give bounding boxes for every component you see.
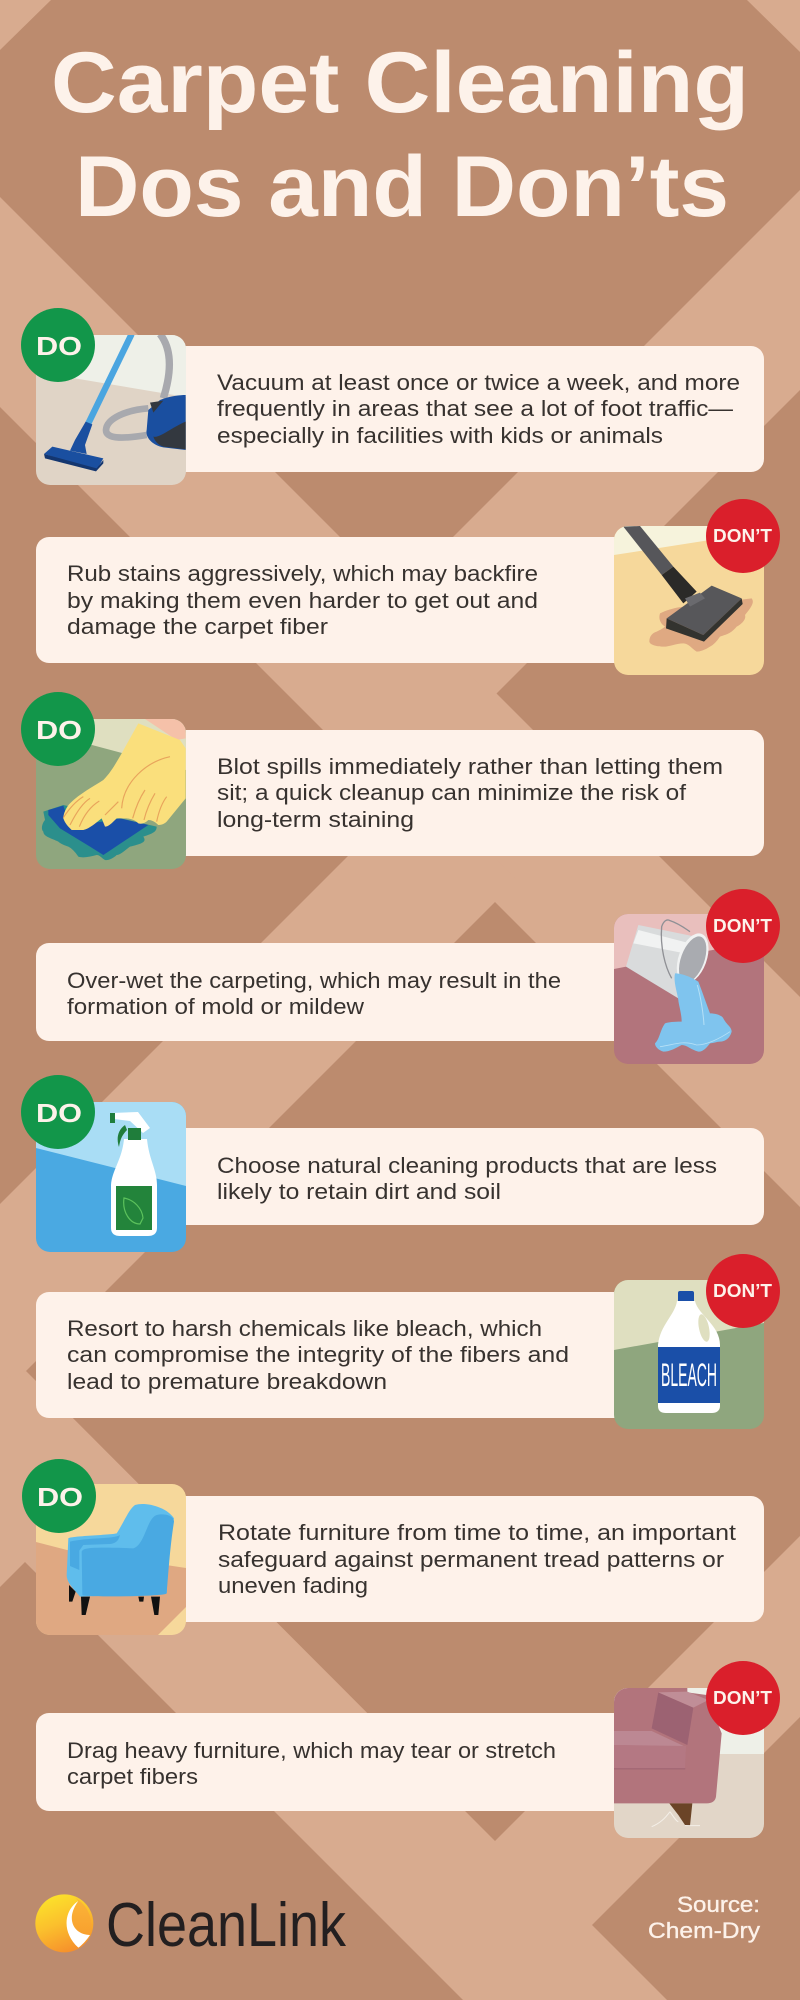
badge: dont: [706, 499, 780, 573]
text card: [36, 537, 650, 663]
badge: dont: DON’T: [713, 916, 772, 936]
text card: [36, 1292, 650, 1418]
icon: bleach bottle: BLEACH: [661, 1357, 717, 1393]
text card: lead to premature breakdown: [67, 1369, 387, 1394]
text card: Over-wet the carpeting, which may result in the: [67, 968, 561, 993]
badge: do: DO: [37, 1482, 83, 1512]
text card: [150, 1496, 764, 1622]
title: Carpet Cleaning: [51, 35, 749, 131]
badge: dont: [706, 1661, 780, 1735]
icon: spray bottle: [36, 1102, 186, 1252]
panel: do natural products: [21, 1075, 764, 1252]
badge: dont: [706, 889, 780, 963]
icon: bleach bottle: [614, 1280, 764, 1429]
icon: glove blotting spill: [36, 719, 186, 869]
text card: [36, 1713, 650, 1811]
panel: do rotate furniture: [22, 1459, 764, 1635]
text card: safeguard against permanent tread patterns or: [218, 1547, 724, 1572]
text card: long-term staining: [217, 807, 414, 832]
text card: by making them even harder to get out and: [67, 588, 538, 613]
source note: Chem-Dry: [648, 1918, 760, 1943]
text card: likely to retain dirt and soil: [217, 1179, 501, 1204]
badge: do: DO: [36, 715, 82, 745]
panel: dont over-wet: [36, 889, 780, 1064]
text card: Choose natural cleaning products that are less: [217, 1153, 717, 1178]
icon: logo sun: [35, 1894, 93, 1952]
text card: Vacuum at least once or twice a week, and more: [217, 370, 740, 395]
text card: sit; a quick cleanup can minimize the risk of: [217, 780, 687, 805]
source note: [648, 1892, 760, 1943]
text card: Drag heavy furniture, which may tear or stretch: [67, 1738, 556, 1763]
text card: Resort to harsh chemicals like bleach, which: [67, 1316, 542, 1341]
panel: do vacuum: [21, 308, 764, 485]
source note: Source:: [677, 1892, 760, 1917]
badge: dont: DON’T: [713, 526, 772, 546]
text card: [36, 943, 650, 1041]
text card: uneven fading: [218, 1573, 368, 1598]
badge: do: DO: [36, 1098, 82, 1128]
badge: do: [21, 1075, 95, 1149]
badge: dont: DON’T: [713, 1281, 772, 1301]
badge: do: [22, 1459, 96, 1533]
logo: CleanLink: CleanLink: [106, 1891, 347, 1960]
panel: dont harsh chemicals: [36, 1254, 780, 1429]
text card: [150, 730, 764, 856]
panel: dont drag furniture: [36, 1661, 780, 1838]
icon: vacuum cleaner: [36, 334, 186, 485]
text card: carpet fibers: [67, 1764, 198, 1789]
panel: dont rub: [36, 499, 780, 675]
text card: Blot spills immediately rather than letting them: [217, 754, 723, 779]
badge: do: DO: [36, 331, 82, 361]
title: Dos and Don’ts: [75, 139, 729, 235]
text card: frequently in areas that see a lot of foot traffic—: [217, 396, 733, 421]
icon: armchair: [36, 1484, 186, 1635]
title: [51, 35, 749, 235]
logo: CleanLink: [35, 1891, 347, 1960]
icon: scrubbing stain: [614, 526, 764, 675]
text card: Rotate furniture from time to time, an important: [218, 1520, 736, 1545]
text card: damage the carpet fiber: [67, 614, 328, 639]
badge: dont: DON’T: [713, 1688, 772, 1708]
text card: [150, 346, 764, 472]
text card: Rub stains aggressively, which may backfire: [67, 561, 538, 586]
text card: formation of mold or mildew: [67, 994, 364, 1019]
badge: do: [21, 692, 95, 766]
badge: do: [21, 308, 95, 382]
text card: can compromise the integrity of the fibers and: [67, 1342, 569, 1367]
icon: bucket spilling water: [614, 914, 764, 1064]
panel: do blot: [21, 692, 764, 869]
text card: especially in facilities with kids or animals: [217, 423, 663, 448]
text card: [150, 1128, 764, 1225]
badge: dont: [706, 1254, 780, 1328]
icon: dragged sofa: [613, 1687, 764, 1838]
